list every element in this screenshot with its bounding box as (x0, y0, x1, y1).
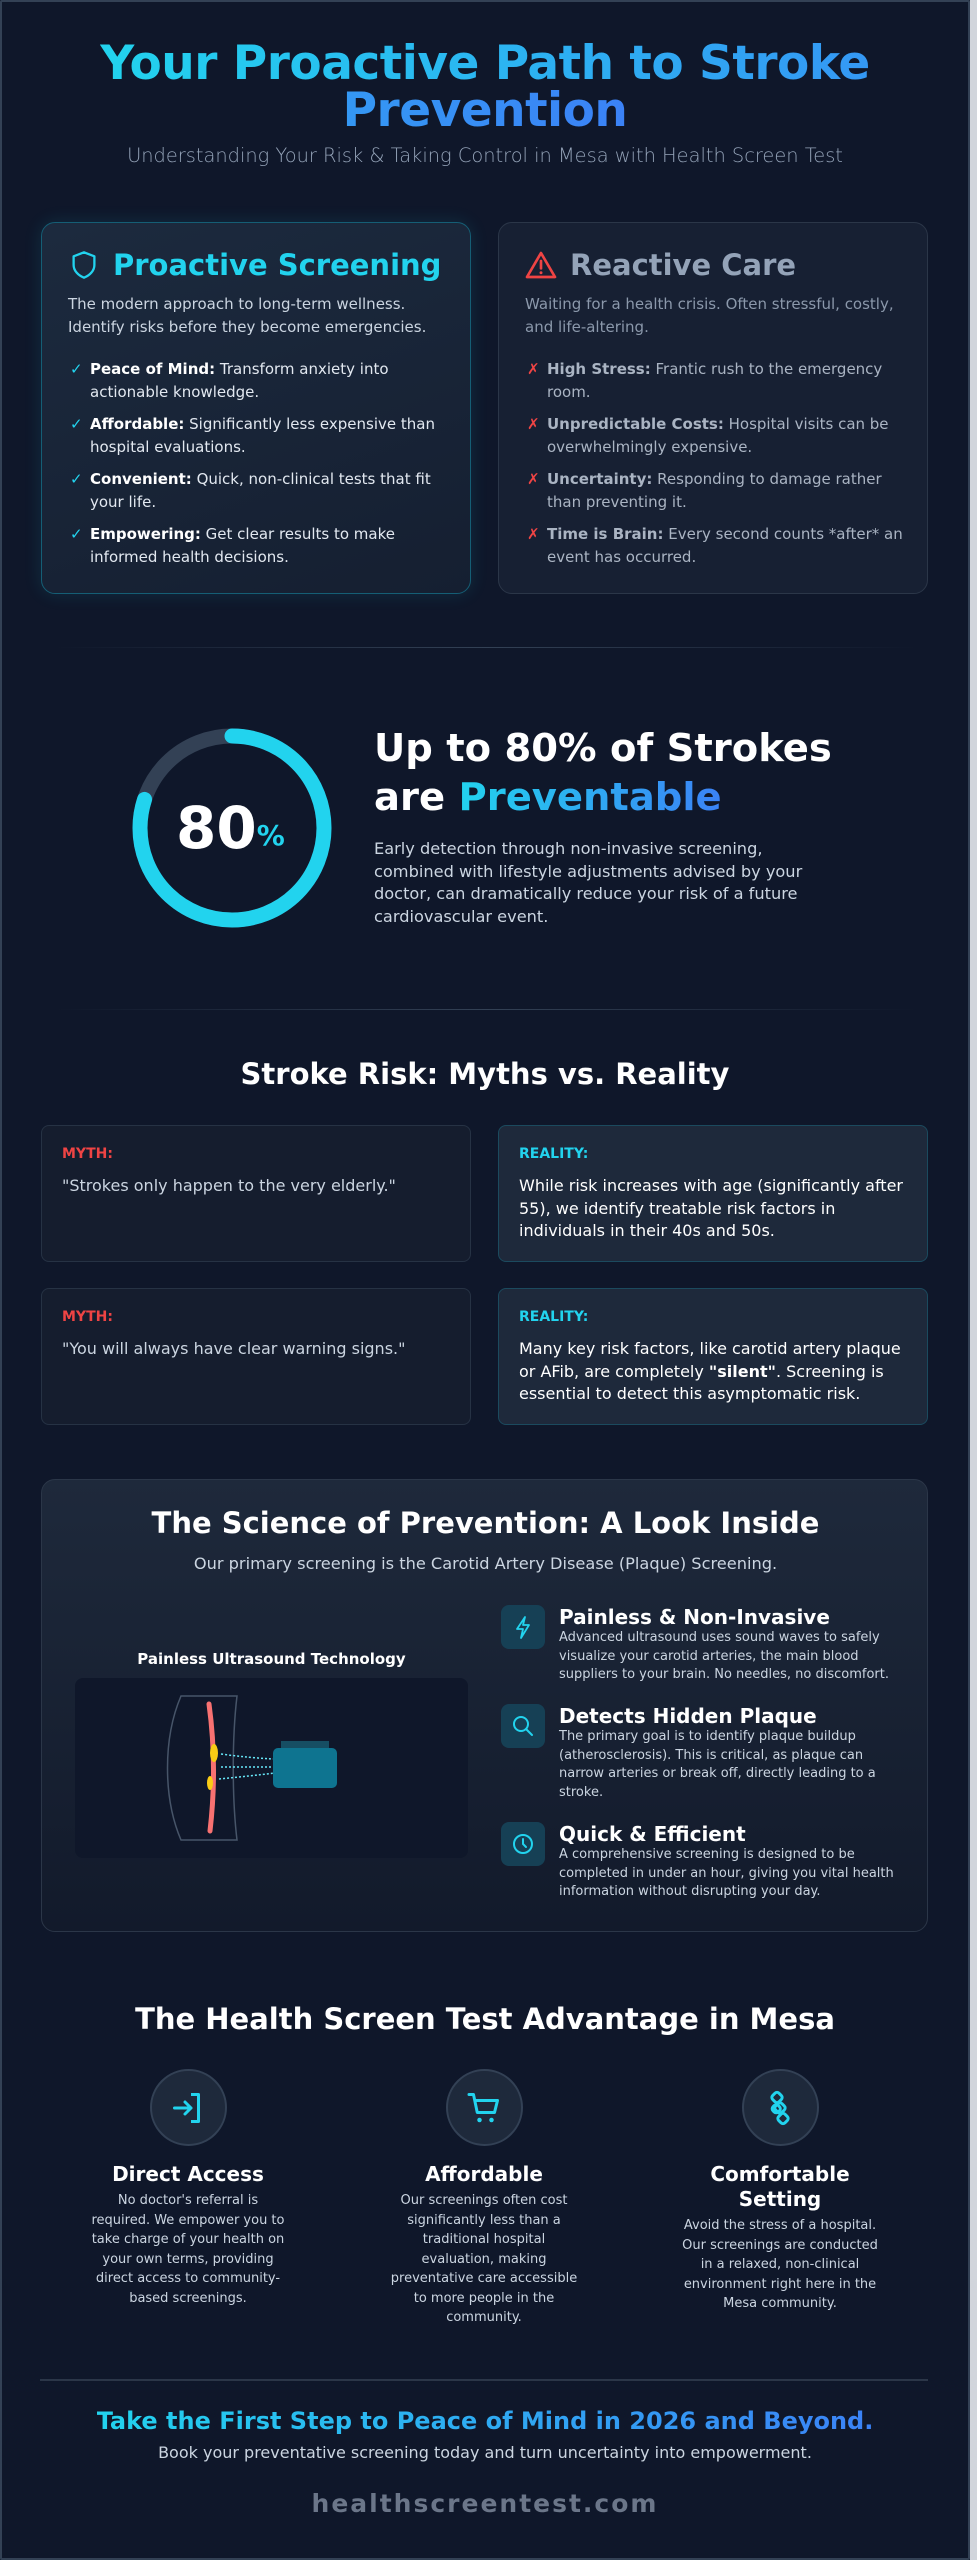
myth 2: "You will always have clear warning signs." (62, 1339, 405, 1358)
icon: shield (72, 251, 96, 279)
website: healthscreentest.com (312, 2489, 658, 2518)
advantage: direct access: Direct Access (112, 2162, 264, 2186)
feature: painless: Advanced ultrasound uses sound waves to safely visualize your carotid arteries, the main blood suppliers to your brain. No needles, no discomfort. (559, 1630, 889, 1682)
panel: proactive screening: ✓ (70, 470, 83, 488)
advantage: comfortable: Avoid the stress of a hospital. Our screenings are conducted in a relaxed, non-clinical environment right here in the Mesa community. (682, 2218, 878, 2311)
description: The modern approach to long-term wellness. Identify risks before they become emergencies. (68, 295, 426, 336)
benefit list: Convenient: Quick, non-clinical tests that fit your life. (90, 470, 431, 511)
panel: science of prevention (41, 1479, 928, 1932)
reality 2: REALITY: (519, 1309, 588, 1325)
illustration caption: Painless Ultrasound Technology (137, 1650, 406, 1668)
title: Your Proactive Path to Stroke (100, 36, 870, 91)
heading: Reactive Care (570, 248, 796, 282)
title: Prevention (343, 83, 627, 138)
advantage: direct access (91, 2069, 284, 2306)
panel: reactive care: ✗ (527, 470, 540, 488)
risk list (527, 360, 903, 566)
reality 2: Many key risk factors, like carotid artery plaque or AFib, are completely "silent". Screening is essential to detect this asymptomatic risk. (519, 1339, 901, 1403)
myth 2 (41, 1288, 471, 1425)
stat heading: are Preventable (374, 775, 722, 820)
myth 1 (41, 1125, 471, 1262)
call to action: Take the First Step to Peace of Mind in 2026 and Beyond. (97, 2407, 873, 2435)
stat heading (374, 726, 832, 820)
risk list: Uncertainty: Responding to damage rather than preventing it. (547, 470, 882, 511)
benefit list (70, 360, 435, 566)
heading: Proactive Screening (113, 248, 441, 282)
advantage: affordable: Our screenings often cost significantly less than a traditional hospital evaluation, making preventative care accessible to more people in the community. (391, 2193, 577, 2325)
feature: quick: A comprehensive screening is designed to be completed in under an hour, giving you vital health information without disrupting your day. (559, 1847, 894, 1899)
panel: proactive screening: ✓ (70, 415, 83, 433)
subheading: Our primary screening is the Carotid Artery Disease (Plaque) Screening. (194, 1554, 777, 1573)
panel: reactive care (498, 222, 928, 594)
feature: detects plaque: Detects Hidden Plaque (559, 1704, 817, 1728)
advantage: comfortable (682, 2069, 878, 2311)
title (100, 36, 870, 138)
feature: painless: Painless & Non-Invasive (559, 1605, 830, 1629)
myth 1: MYTH: (62, 1146, 113, 1162)
chart: 80% ring (132, 728, 332, 928)
reality 1: While risk increases with age (significantly after 55), we identify treatable risk factors in individuals in their 40s and 50s. (519, 1176, 903, 1240)
risk list: High Stress: Frantic rush to the emergency room. (547, 360, 882, 401)
heading: myths vs reality: Stroke Risk: Myths vs. Reality (241, 1057, 729, 1091)
icon: warning (526, 252, 556, 278)
risk list: Time is Brain: Every second counts *after* an event has occurred. (547, 525, 903, 566)
stat text: Early detection through non-invasive screening, combined with lifestyle adjustments advised by your doctor, can dramatically reduce your risk of a future cardiovascular event. (374, 839, 802, 926)
feature: quick (501, 1822, 894, 1899)
stat number: 80% (176, 794, 285, 862)
advantage: comfortable: Setting (739, 2187, 821, 2211)
myth 1: "Strokes only happen to the very elderly." (62, 1176, 396, 1195)
benefit list: Peace of Mind: Transform anxiety into actionable knowledge. (90, 360, 389, 401)
panel: reactive care: ✗ (527, 360, 540, 378)
benefit list: Empowering: Get clear results to make informed health decisions. (90, 525, 395, 566)
reality 1 (498, 1125, 928, 1262)
advantage: affordable (391, 2069, 577, 2325)
description: Waiting for a health crisis. Often stressful, costly, and life-altering. (525, 295, 894, 336)
cta subtext: Book your preventative screening today and turn uncertainty into empowerment. (158, 2443, 812, 2462)
panel: proactive screening (41, 222, 471, 594)
subtitle: Understanding Your Risk & Taking Control in Mesa with Health Screen Test (127, 144, 843, 167)
advantage: direct access: No doctor's referral is required. We empower you to take charge of your health on your own terms, providing direct access to community-based screenings. (91, 2193, 284, 2306)
reality 1: REALITY: (519, 1146, 588, 1162)
heading: advantage: The Health Screen Test Advantage in Mesa (135, 2002, 835, 2036)
advantage: affordable: Affordable (425, 2162, 543, 2186)
feature: detects plaque: The primary goal is to identify plaque buildup (atherosclerosis). This is critical, as plaque can narrow arteries or break off, directly leading to a stroke. (559, 1729, 876, 1800)
illustration: ultrasound (75, 1678, 468, 1858)
panel: proactive screening: ✓ (70, 360, 83, 378)
feature: detects plaque (501, 1704, 876, 1800)
reality 2 (498, 1288, 928, 1425)
panel: reactive care: ✗ (527, 415, 540, 433)
feature: quick: Quick & Efficient (559, 1822, 746, 1846)
risk list: Unpredictable Costs: Hospital visits can be overwhelmingly expensive. (547, 415, 889, 456)
panel: proactive screening: ✓ (70, 525, 83, 543)
myth 2: MYTH: (62, 1309, 113, 1325)
heading: The Science of Prevention: A Look Inside (152, 1506, 819, 1540)
stat heading: Up to 80% of Strokes (374, 726, 832, 771)
benefit list: Affordable: Significantly less expensive than hospital evaluations. (90, 415, 435, 456)
panel: reactive care: ✗ (527, 525, 540, 543)
advantage: comfortable: Comfortable (710, 2162, 850, 2186)
feature: painless (501, 1605, 889, 1682)
